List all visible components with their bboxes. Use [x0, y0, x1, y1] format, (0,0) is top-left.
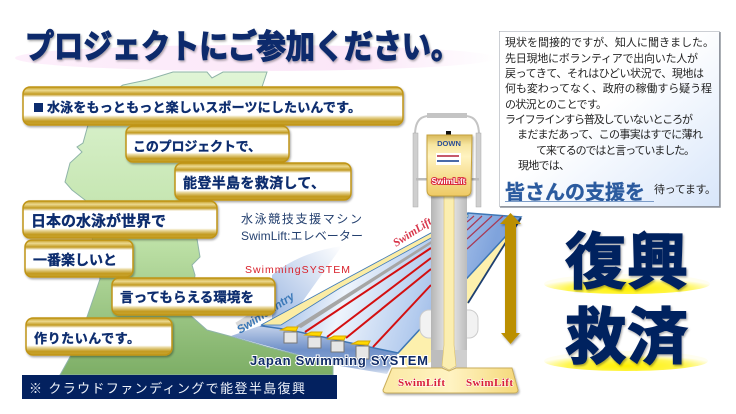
outer right edge — [468, 218, 521, 303]
speech bars — [23, 87, 403, 355]
handle frame — [415, 116, 479, 205]
bottom banner: ※ クラウドファンディングで能登半島復興 — [29, 381, 305, 396]
message box: の状況とのことです。 — [505, 97, 607, 111]
bar 5 — [25, 240, 133, 277]
message box: て来てるのではと言っていました。 — [536, 144, 695, 157]
grey swoosh behind entry label — [238, 306, 272, 327]
machine caption: SwimLift:エレベーター — [241, 229, 363, 243]
bar 5: 一番楽しいと — [33, 252, 117, 268]
swimming pool illustration — [231, 213, 521, 374]
bar 2: このプロジェクトで、 — [133, 139, 261, 154]
title underline swoosh — [15, 45, 497, 71]
bar 7: 作りたいんです。 — [34, 331, 140, 346]
near-side yellow strip — [398, 217, 521, 371]
SwimLift machine: SwimLift — [432, 176, 466, 186]
bar 6 — [112, 278, 275, 315]
bar 2 — [126, 126, 289, 162]
label: Japan Swimming SYSTEM: Japan Swimming SYSTEM — [250, 353, 428, 368]
message box: 戻ってきて、それはひどい状況で、現地は — [505, 66, 704, 80]
red lane ropes — [305, 216, 503, 347]
pool deck — [231, 312, 430, 374]
map: Japan landmass — [60, 72, 333, 375]
label: SwimsEntry: SwimsEntry — [235, 290, 297, 337]
bar 6: 言ってもらえる環境を — [120, 290, 254, 305]
pool water — [262, 213, 521, 353]
message box: ライフラインすら普及していないところが — [505, 112, 693, 126]
SwimLift machine — [383, 113, 518, 393]
yellow far strip — [261, 214, 468, 325]
title: プロジェクトにご参加ください。 — [25, 28, 460, 65]
SwimLift machine: SwimLift — [466, 377, 513, 389]
SwimLift machine: DOWN — [437, 139, 461, 148]
highlight: 復興: 復興 — [565, 228, 688, 296]
bar 4 — [23, 201, 217, 238]
label: SwimmingSYSTEM: SwimmingSYSTEM — [245, 264, 350, 276]
machine caption — [241, 212, 363, 243]
grey lane — [296, 241, 431, 328]
message box: 現地では、 — [518, 159, 570, 172]
blue swoosh behind pool — [272, 246, 342, 320]
bar 1: 水泳をもっともっと楽しいスポーツにしたいんです。 — [47, 100, 361, 115]
highlight: 救済: 救済 — [565, 303, 688, 371]
emphasis: 皆さんの支援を: 皆さんの支援を — [505, 181, 645, 204]
machine caption: 水泳競技支援マシン — [241, 212, 362, 226]
starting blocks — [281, 327, 370, 359]
SwimLift machine: SwimLift — [398, 377, 445, 389]
arrow: up and down — [500, 213, 521, 344]
message box: 先日現地にボランティアで出向いた人が — [505, 51, 698, 65]
bottom banner — [22, 375, 337, 399]
message box: まだまだあって、この事実はすでに薄れ — [517, 127, 703, 141]
bar 1 — [23, 87, 403, 125]
bar 7 — [26, 318, 172, 355]
base — [383, 368, 518, 393]
message box: 現状を間接的ですが、知人に聞きました。 — [505, 35, 714, 49]
bar 3: 能登半島を救済して、 — [183, 175, 325, 191]
bar 3 — [175, 163, 351, 200]
message box — [500, 32, 720, 207]
bar 4: 日本の水泳が世界で — [31, 212, 166, 230]
message box: 待ってます。 — [654, 182, 716, 196]
label: SwimLift on pool: SwimLift — [391, 215, 435, 250]
message box: 何も変わってなく、政府の稼働すら疑う程 — [505, 81, 712, 95]
column — [431, 194, 467, 370]
control head — [446, 131, 451, 136]
side bumps — [420, 310, 478, 338]
